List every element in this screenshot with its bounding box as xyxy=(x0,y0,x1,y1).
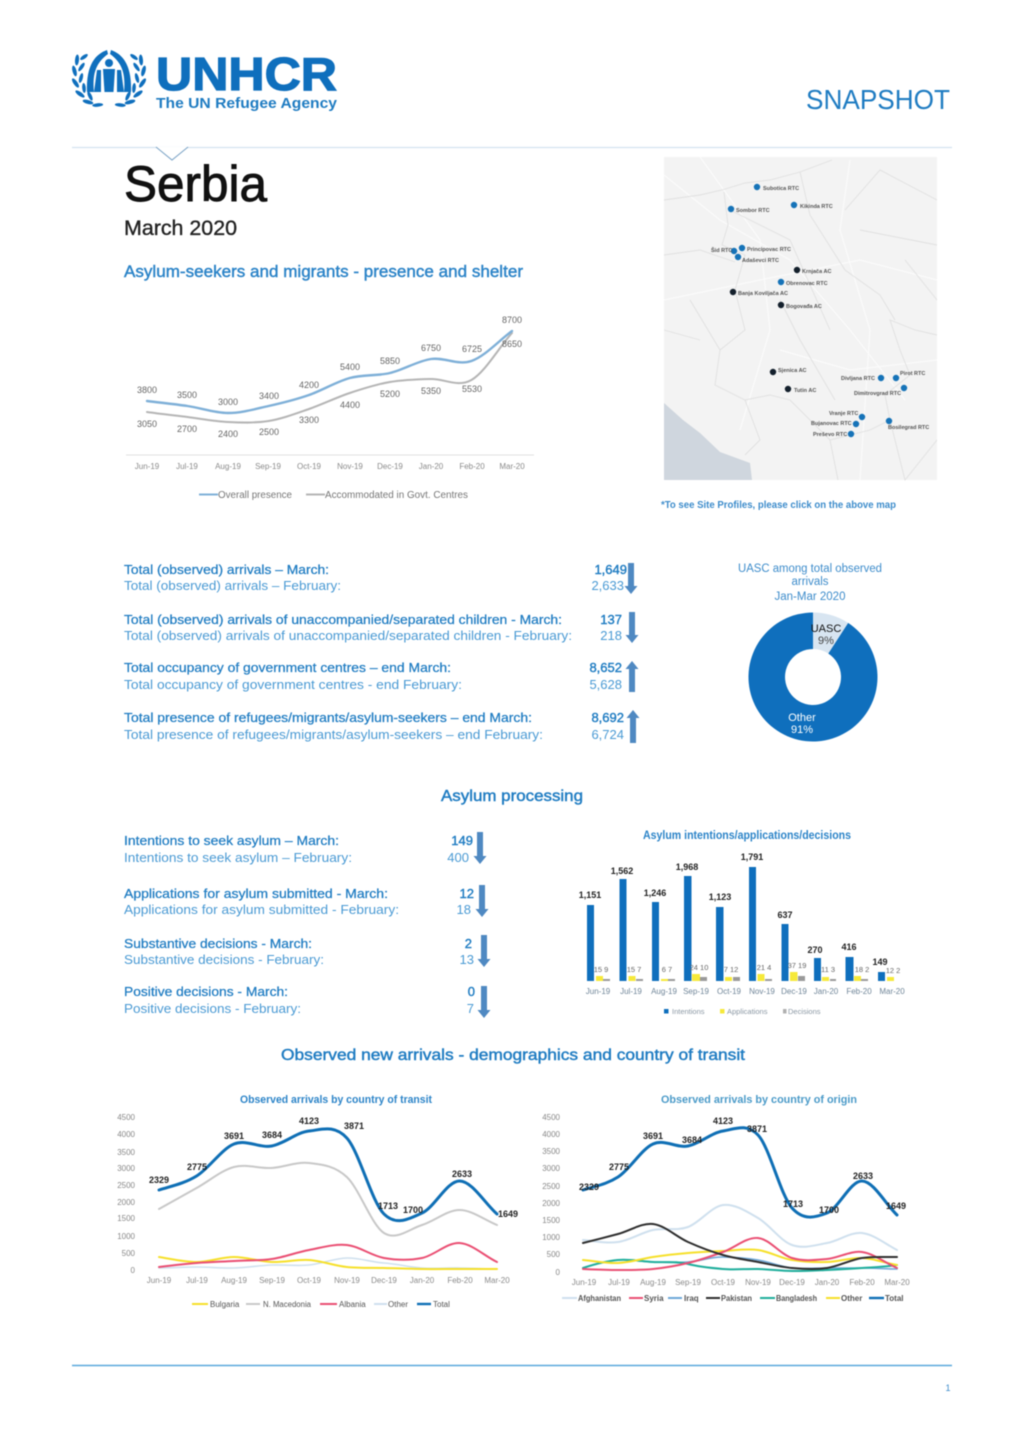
heading: asylum processing: Asylum processing xyxy=(441,788,583,805)
site labels: Adaševci RTC xyxy=(742,258,779,264)
intentions values: 416 xyxy=(841,942,857,952)
transit month axis xyxy=(147,1276,510,1285)
intentions values: 149 xyxy=(872,957,888,967)
site labels: Obrenovac RTC xyxy=(786,281,828,287)
donut chart: UASC among arrivals xyxy=(738,563,882,742)
transit y axis xyxy=(117,1113,136,1275)
transit chart title: Observed arrivals by country of transit xyxy=(240,1094,432,1106)
overall presence values: 3000 xyxy=(218,397,238,407)
line chart: presence and shelter xyxy=(126,315,534,501)
intentions values: 637 xyxy=(777,910,793,920)
overall presence values: 3400 xyxy=(259,391,279,401)
donut title: UASC among total observed xyxy=(738,563,882,575)
stat: intentions: 149 xyxy=(451,833,473,848)
snapshot label: SNAPSHOT xyxy=(806,84,950,115)
accommodated values: 3050 xyxy=(137,419,157,429)
series: Total xyxy=(583,1128,897,1217)
donut labels: 91% xyxy=(791,724,813,736)
UNHCR logo xyxy=(71,48,338,112)
origin month axis xyxy=(572,1278,910,1287)
site labels: Šid RTC xyxy=(711,246,732,254)
origin month axis: Aug-19 xyxy=(640,1278,666,1287)
site labels: Subotica RTC xyxy=(763,186,799,192)
origin month axis: Mar-20 xyxy=(884,1278,910,1287)
segment: other xyxy=(748,612,877,742)
origin month axis: Oct-19 xyxy=(711,1278,736,1287)
bar chart month axis xyxy=(586,987,905,996)
accommodated values xyxy=(137,339,522,439)
stat: positive decisions: Positive decisions - March: xyxy=(124,984,288,999)
stat: intentions: Intentions to seek asylum – March: xyxy=(124,833,339,848)
site labels: Tutin AC xyxy=(794,388,816,394)
site labels: Principovac RTC xyxy=(747,247,791,253)
page number: 1 xyxy=(945,1383,951,1393)
bar chart month axis: Jul-19 xyxy=(620,987,642,996)
bar chart month axis: Mar-20 xyxy=(879,987,905,996)
series: accommodated in govt centres xyxy=(147,333,512,423)
transit month axis: Oct-19 xyxy=(297,1276,322,1285)
donut labels xyxy=(788,623,841,736)
transit y axis: 1000 xyxy=(117,1232,136,1241)
series: Other xyxy=(159,1258,497,1269)
stat: total arrivals: 2,633 xyxy=(591,578,624,593)
overall presence values: 5850 xyxy=(380,356,400,366)
origin y axis: 2000 xyxy=(542,1199,561,1208)
stat: applications xyxy=(124,885,488,917)
origin legend: Afghanistan xyxy=(578,1294,621,1303)
origin y axis: 500 xyxy=(547,1250,561,1259)
transit total values: 1700 xyxy=(403,1205,423,1215)
applications and decisions values: 21 4 xyxy=(757,963,771,972)
accommodated values: 8650 xyxy=(502,339,522,349)
site labels: Bosilegrad RTC xyxy=(888,425,929,431)
overall presence values: 8700 xyxy=(502,315,522,325)
series: Bulgaria xyxy=(159,1257,497,1269)
stat: total arrivals: Total (observed) arrivals – February: xyxy=(124,578,341,593)
bar chart month axis: Nov-19 xyxy=(749,987,775,996)
stat: total presence: Total presence of refugees/migrants/asylum-seekers – end March: xyxy=(124,710,532,725)
stat: government centre occupancy: Total occupancy of government centres – end March: xyxy=(124,660,451,675)
bar chart month axis: Jun-19 xyxy=(586,987,611,996)
date: March 2020 xyxy=(124,217,237,240)
month axis: Jul-19 xyxy=(176,462,198,471)
overall presence values: 6725 xyxy=(462,344,482,354)
series: Pakistan xyxy=(583,1224,897,1269)
transit total values: 3871 xyxy=(344,1121,364,1131)
origin month axis: Nov-19 xyxy=(745,1278,771,1287)
site labels: Krnjača AC xyxy=(802,269,831,275)
month axis xyxy=(135,462,525,471)
bar chart legend xyxy=(664,1007,821,1016)
black asylum centres xyxy=(730,267,800,392)
sea xyxy=(664,403,752,480)
roads xyxy=(664,157,937,480)
origin month axis: Jul-19 xyxy=(608,1278,630,1287)
series: Albania xyxy=(159,1243,497,1267)
panel: arrivals and occupancy statistics xyxy=(124,562,640,743)
stat: government centre occupancy: Total occupancy of government centres - end February: xyxy=(124,677,462,692)
stat: total presence: 6,724 xyxy=(591,727,624,742)
transit month axis: Mar-20 xyxy=(484,1276,510,1285)
transit y axis: 0 xyxy=(131,1266,136,1275)
site labels: Bujanovac RTC xyxy=(811,421,852,427)
origin month axis: Sep-19 xyxy=(675,1278,701,1287)
transit month axis: Dec-19 xyxy=(371,1276,397,1285)
legend: Overall presence xyxy=(218,490,292,501)
bar chart month axis: Dec-19 xyxy=(781,987,807,996)
series: Iraq xyxy=(583,1257,897,1269)
transit legend: Bulgaria xyxy=(210,1300,240,1309)
donut labels: UASC xyxy=(811,623,841,635)
site labels: Sombor RTC xyxy=(736,208,770,214)
month axis: Jun-19 xyxy=(135,462,160,471)
stat: government centre occupancy xyxy=(124,660,638,692)
month axis: Oct-19 xyxy=(297,462,322,471)
transit month axis: Feb-20 xyxy=(447,1276,473,1285)
overall presence values: 4200 xyxy=(299,380,319,390)
applications and decisions values: 15 7 xyxy=(627,965,641,974)
applications and decisions values: 12 2 xyxy=(886,966,900,975)
stat: government centre occupancy: 8,652 xyxy=(589,660,622,675)
applications and decisions values xyxy=(594,961,900,975)
transit total values: 2633 xyxy=(452,1169,472,1179)
stat: substantive decisions: Substantive decisions - March: xyxy=(124,936,312,951)
site labels: Dimitrovgrad RTC xyxy=(854,391,901,397)
applications and decisions values: 15 9 xyxy=(594,965,608,974)
segment: UASC xyxy=(813,612,848,654)
origin total values: 1713 xyxy=(783,1199,803,1209)
accommodated values: 5530 xyxy=(462,384,482,394)
origin y axis: 1000 xyxy=(542,1233,561,1242)
origin legend: Total xyxy=(885,1294,904,1303)
origin month axis: Dec-19 xyxy=(779,1278,805,1287)
series: Afghanistan xyxy=(583,1205,897,1250)
transit total values: 3691 xyxy=(224,1131,244,1141)
stat: intentions: 400 xyxy=(447,850,469,865)
site labels: Pirot RTC xyxy=(900,371,925,377)
donut labels: Other xyxy=(788,712,816,724)
series: Bangladesh xyxy=(583,1260,897,1271)
stat: unaccompanied children arrivals: 137 xyxy=(600,612,622,627)
origin total values: 3871 xyxy=(747,1124,767,1134)
transit legend: Other xyxy=(388,1300,408,1309)
origin y axis: 2500 xyxy=(542,1182,561,1191)
accommodated values: 2400 xyxy=(218,429,238,439)
origin chart title: Observed arrivals by country of origin xyxy=(661,1094,857,1106)
transit total values: 2329 xyxy=(149,1175,169,1185)
line chart: arrivals by country of transit xyxy=(117,1094,518,1309)
transit legend xyxy=(192,1300,450,1309)
accommodated values: 4400 xyxy=(340,400,360,410)
heading: demographics and transit: Observed new arrivals - demographics and country of transit xyxy=(281,1047,746,1064)
overall presence values: 5400 xyxy=(340,362,360,372)
origin legend: Other xyxy=(841,1294,862,1303)
origin y axis: 4500 xyxy=(542,1113,561,1122)
stat: positive decisions: 7 xyxy=(467,1001,474,1016)
transit y axis: 3000 xyxy=(117,1164,136,1173)
accommodated values: 5350 xyxy=(421,386,441,396)
series: Syria xyxy=(583,1238,897,1270)
applications and decisions values: 11 3 xyxy=(821,965,835,974)
origin legend xyxy=(562,1294,904,1303)
origin month axis: Feb-20 xyxy=(849,1278,875,1287)
origin legend: Pakistan xyxy=(721,1294,752,1303)
header rule with chevron xyxy=(72,147,952,160)
intentions values xyxy=(579,852,888,967)
logo wordmark: UNHCR xyxy=(156,48,337,100)
transit y axis: 4500 xyxy=(117,1113,136,1122)
stat: unaccompanied children arrivals xyxy=(124,612,638,643)
transit total values: 2775 xyxy=(187,1162,207,1172)
intentions values: 270 xyxy=(807,945,823,955)
site labels: Divljana RTC xyxy=(841,376,875,382)
stat: applications: 12 xyxy=(460,886,474,901)
transit legend: Albania xyxy=(339,1300,366,1309)
transit total values: 3684 xyxy=(262,1130,282,1140)
intentions values: 1,151 xyxy=(579,890,601,900)
logo tagline: The UN Refugee Agency xyxy=(156,95,338,112)
transit y axis: 500 xyxy=(122,1249,136,1258)
stat: total arrivals xyxy=(124,562,638,594)
month axis: Dec-19 xyxy=(377,462,403,471)
transit total values xyxy=(149,1116,518,1219)
origin legend: Bangladesh xyxy=(776,1294,817,1303)
transit month axis: Jul-19 xyxy=(186,1276,208,1285)
transit total values: 4123 xyxy=(299,1116,319,1126)
blue transit centres xyxy=(728,184,907,437)
map caption: *To see Site Profiles, please click on the above map xyxy=(661,499,896,511)
accommodated values: 2500 xyxy=(259,427,279,437)
overall presence values: 3800 xyxy=(137,385,157,395)
overall presence values: 6750 xyxy=(421,343,441,353)
site labels xyxy=(711,186,929,438)
overall presence values: 3500 xyxy=(177,390,197,400)
intentions values: 1,123 xyxy=(709,892,731,902)
origin total values: 2775 xyxy=(609,1162,629,1172)
origin legend: Iraq xyxy=(684,1294,699,1303)
transit y axis: 4000 xyxy=(117,1130,136,1139)
stat: total presence xyxy=(124,710,640,743)
stat: total arrivals: Total (observed) arrivals – March: xyxy=(124,562,329,577)
applications and decisions values: 18 2 xyxy=(855,965,869,974)
month axis: Mar-20 xyxy=(499,462,525,471)
series: Other xyxy=(583,1249,897,1265)
stat: unaccompanied children arrivals: 218 xyxy=(600,628,622,643)
stat: positive decisions xyxy=(124,984,490,1018)
panel: asylum processing statistics xyxy=(124,832,490,1018)
origin y axis: 0 xyxy=(556,1268,561,1277)
stat: total presence: 8,692 xyxy=(591,710,624,725)
icon: laurel wreath with sheltering hands xyxy=(71,50,147,107)
series: overall presence xyxy=(147,331,512,413)
transit legend: Total xyxy=(433,1300,450,1309)
stat: unaccompanied children arrivals: Total (observed) arrivals of unaccompanied/separated children - February: xyxy=(124,628,572,643)
month axis: Sep-19 xyxy=(255,462,281,471)
transit total values: 1713 xyxy=(378,1201,398,1211)
donut labels: 9% xyxy=(818,635,834,647)
site labels: Bogovađa AC xyxy=(786,304,822,310)
transit legend: N. Macedonia xyxy=(263,1300,312,1309)
month axis: Nov-19 xyxy=(337,462,363,471)
stat: government centre occupancy: 5,628 xyxy=(589,677,622,692)
donut title: arrivals xyxy=(791,576,829,588)
origin legend: Syria xyxy=(644,1294,664,1303)
origin total values: 1700 xyxy=(819,1205,839,1215)
origin y axis: 1500 xyxy=(542,1216,561,1225)
legend: Accommodated in Govt. Centres xyxy=(325,490,468,501)
intentions values: 1,562 xyxy=(611,866,633,876)
bar chart legend: Applications xyxy=(727,1007,768,1016)
origin y axis xyxy=(542,1113,561,1277)
title: Serbia xyxy=(124,156,267,212)
map of reception centres xyxy=(664,157,937,480)
overall presence values xyxy=(137,315,522,407)
origin y axis: 3000 xyxy=(542,1164,561,1173)
origin total values xyxy=(579,1116,906,1215)
applications and decisions values: 24 10 xyxy=(690,963,708,972)
transit y axis: 2500 xyxy=(117,1181,136,1190)
stat: substantive decisions: 13 xyxy=(460,952,474,967)
month axis: Aug-19 xyxy=(215,462,241,471)
stat: applications: Applications for asylum submitted - March: xyxy=(124,886,388,901)
bar chart month axis: Aug-19 xyxy=(651,987,677,996)
series: Total xyxy=(159,1129,497,1221)
transit y axis: 2000 xyxy=(117,1198,136,1207)
accommodated values: 5200 xyxy=(380,389,400,399)
stat: total arrivals: 1,649 xyxy=(594,562,627,577)
stat: positive decisions: Positive decisions - February: xyxy=(124,1001,301,1016)
legend xyxy=(199,490,468,501)
bar chart month axis: Oct-19 xyxy=(717,987,742,996)
intentions bars xyxy=(587,867,885,981)
origin total values: 3684 xyxy=(682,1135,702,1145)
line chart: arrivals by country of origin xyxy=(542,1094,910,1303)
series: N. Macedonia xyxy=(159,1163,497,1236)
bar chart legend: Intentions xyxy=(672,1007,705,1016)
transit month axis: Nov-19 xyxy=(334,1276,360,1285)
transit month axis: Aug-19 xyxy=(221,1276,247,1285)
transit month axis: Sep-19 xyxy=(259,1276,285,1285)
accommodated values: 3300 xyxy=(299,415,319,425)
bar chart month axis: Sep-19 xyxy=(683,987,709,996)
month axis: Feb-20 xyxy=(459,462,485,471)
origin total values: 2633 xyxy=(853,1171,873,1181)
transit month axis: Jun-19 xyxy=(147,1276,172,1285)
stat: positive decisions: 0 xyxy=(468,984,475,999)
applications and decisions values: 7 12 xyxy=(724,965,738,974)
origin month axis: Jan-20 xyxy=(815,1278,840,1287)
transit y axis: 3500 xyxy=(117,1148,136,1157)
donut title xyxy=(738,563,882,603)
intentions values: 1,968 xyxy=(676,862,698,872)
site labels: Sjenica AC xyxy=(778,368,807,374)
stat: applications: 18 xyxy=(457,902,471,917)
origin y axis: 4000 xyxy=(542,1130,561,1139)
stat: intentions: Intentions to seek asylum – February: xyxy=(124,850,352,865)
bar chart legend: Decisions xyxy=(788,1007,821,1016)
accommodated values: 2700 xyxy=(177,424,197,434)
bar chart month axis: Feb-20 xyxy=(846,987,872,996)
site labels: Banja Koviljača AC xyxy=(738,291,788,297)
stat: substantive decisions: 2 xyxy=(465,936,472,951)
transit total values: 1649 xyxy=(498,1209,518,1219)
stat: intentions xyxy=(124,832,486,865)
bar chart month axis: Jan-20 xyxy=(814,987,839,996)
intentions values: 1,791 xyxy=(741,852,763,862)
footer rule xyxy=(72,1364,952,1366)
origin total values: 4123 xyxy=(713,1116,733,1126)
stat: applications: Applications for asylum submitted - February: xyxy=(124,902,399,917)
donut title: Jan-Mar 2020 xyxy=(775,591,845,603)
origin month axis: Jun-19 xyxy=(572,1278,597,1287)
origin total values: 1649 xyxy=(886,1201,906,1211)
transit month axis: Jan-20 xyxy=(410,1276,435,1285)
stat: substantive decisions: Substantive decisions - February: xyxy=(124,952,324,967)
borders xyxy=(664,160,937,480)
intentions values: 1,246 xyxy=(644,888,666,898)
decisions bars xyxy=(603,976,868,981)
applications and decisions values: 37 19 xyxy=(788,961,806,970)
applications bars xyxy=(596,972,894,981)
bar chart: asylum intentions, applications, decisions xyxy=(579,830,905,1016)
origin y axis: 3500 xyxy=(542,1147,561,1156)
bar chart title: Asylum intentions/applications/decisions xyxy=(643,830,851,842)
origin total values: 2329 xyxy=(579,1182,599,1192)
site labels: Preševo RTC xyxy=(813,432,847,438)
site labels: Vranje RTC xyxy=(829,411,858,417)
stat: unaccompanied children arrivals: Total (observed) arrivals of unaccompanied/separated children - March: xyxy=(124,612,562,627)
site labels: Kikinda RTC xyxy=(800,204,833,210)
stat: total presence: Total presence of refugees/migrants/asylum-seekers – end February: xyxy=(124,727,543,742)
transit y axis: 1500 xyxy=(117,1214,136,1223)
applications and decisions values: 6 7 xyxy=(662,965,672,974)
origin total values: 3691 xyxy=(643,1131,663,1141)
heading: presence and shelter: Asylum-seekers and migrants - presence and shelter xyxy=(124,262,523,281)
stat: substantive decisions xyxy=(124,935,490,967)
month axis: Jan-20 xyxy=(419,462,444,471)
